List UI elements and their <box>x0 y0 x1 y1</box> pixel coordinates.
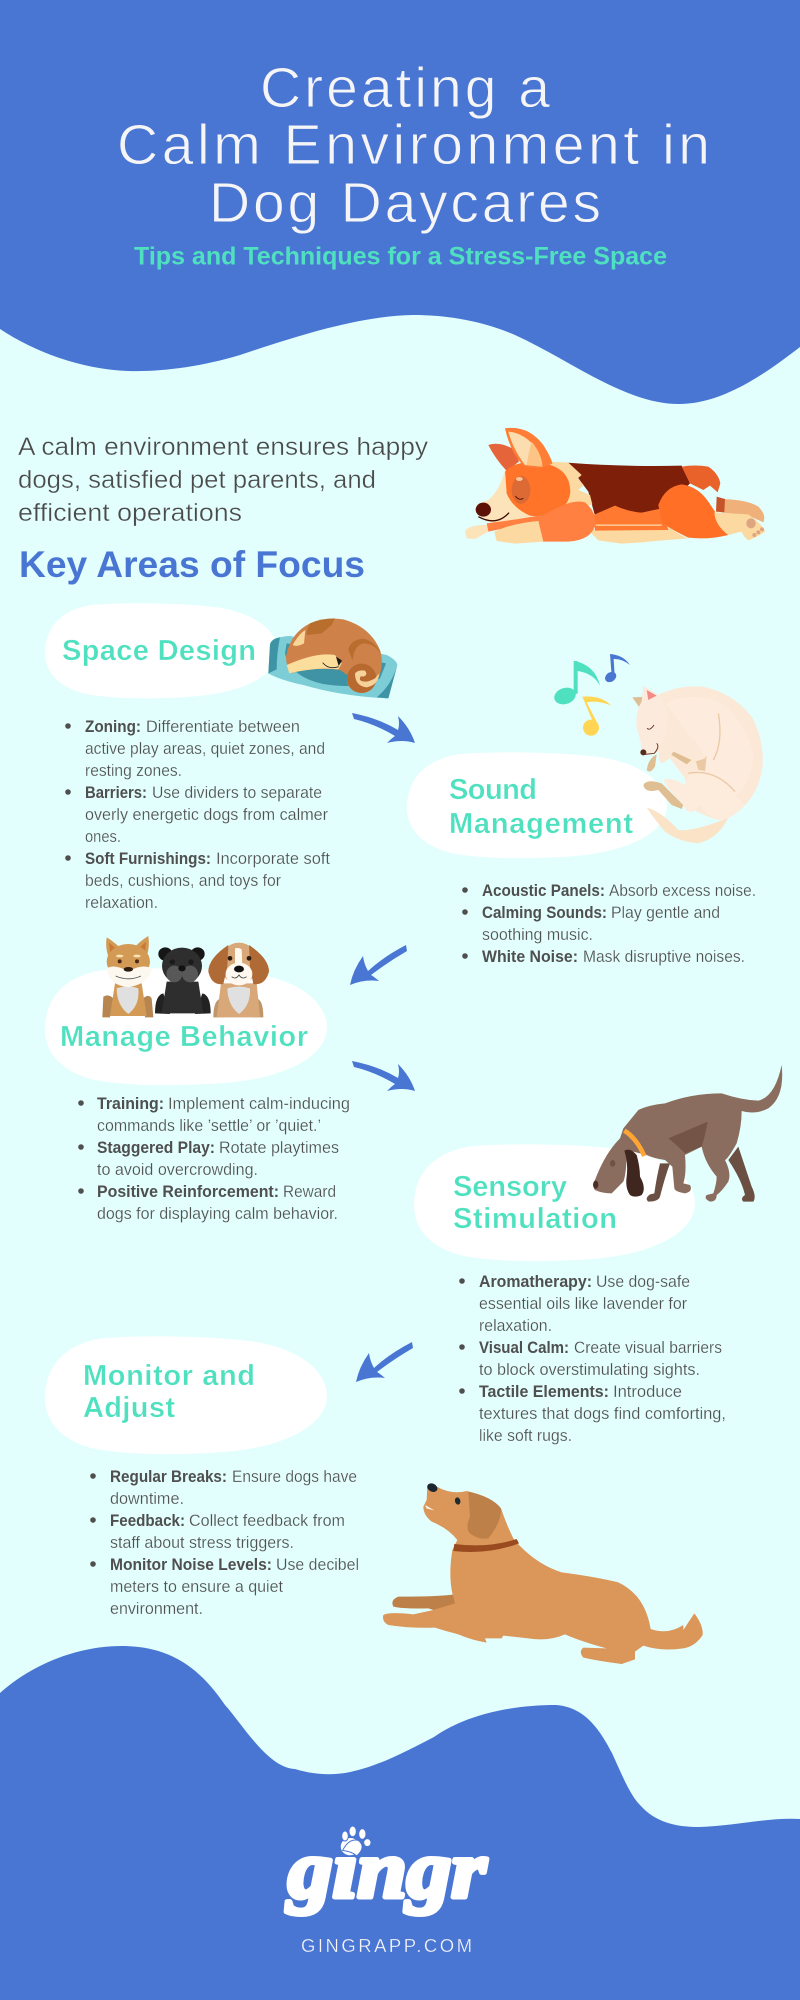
heading blob: sound management: Sound <box>449 774 537 806</box>
bullet list: space design: Differentiate between <box>146 718 300 736</box>
header wave background <box>0 0 800 404</box>
bullet list: space design: ones. <box>85 828 121 846</box>
title <box>117 56 710 235</box>
bullet list: sensory stimulation: Introduce <box>613 1383 682 1401</box>
heading blob: monitor and adjust: Monitor and <box>83 1360 255 1392</box>
arrow: sound to behavior <box>350 945 407 985</box>
bullet list: sound management: Play gentle and <box>611 904 720 922</box>
bullet list: monitor and adjust: staff about stress triggers. <box>110 1534 294 1552</box>
bullet list: manage behavior: Implement calm-inducing <box>168 1095 350 1113</box>
bullet list: monitor and adjust: Regular Breaks: <box>110 1468 227 1486</box>
bullet list: sound management: Mask disruptive noises. <box>583 948 745 966</box>
heading blob: space design: Space Design <box>62 635 256 667</box>
heading blob: manage behavior <box>45 968 327 1085</box>
intro text: dogs, satisfied pet parents, and <box>18 466 376 494</box>
logo: gingr: gingr <box>286 1824 487 1915</box>
bullet list: sensory stimulation <box>459 1273 726 1445</box>
bullet list: space design: relaxation. <box>85 894 158 912</box>
bullet list: monitor and adjust: Collect feedback from <box>189 1512 345 1530</box>
icon: three sitting dogs <box>102 936 269 1017</box>
heading blob: sound management <box>407 752 667 858</box>
panel: manage behavior <box>45 936 350 1223</box>
icon: brown dog sniffing <box>593 1065 782 1202</box>
panel: sound management <box>407 654 763 966</box>
bullet list: manage behavior: dogs for displaying calm behavior. <box>97 1205 338 1223</box>
bullet list: manage behavior <box>78 1095 350 1223</box>
bullet list: sensory stimulation: Tactile Elements: <box>479 1383 609 1401</box>
bullet list: sensory stimulation: essential oils like lavender for <box>479 1295 687 1313</box>
bullet list: space design: Incorporate soft <box>216 850 330 868</box>
bullet list: sensory stimulation: to block overstimulating sights. <box>479 1361 700 1379</box>
bullet list: sound management <box>462 882 756 966</box>
bullet list: monitor and adjust: Ensure dogs have <box>232 1468 357 1486</box>
bullet list: space design: Barriers: <box>85 784 147 802</box>
panel: sensory stimulation <box>414 1065 782 1445</box>
heading blob: sound management: Management <box>449 808 633 840</box>
bullet list: monitor and adjust <box>90 1468 359 1618</box>
heading blob: manage behavior: Manage Behavior <box>60 1021 308 1053</box>
bullet list: monitor and adjust: meters to ensure a quiet <box>110 1578 283 1596</box>
icon: dog sleeping on bed <box>268 618 397 698</box>
bullet list: sound management: Calming Sounds: <box>482 904 607 922</box>
bullet list: manage behavior: Staggered Play: <box>97 1139 215 1157</box>
panel: monitor and adjust <box>45 1336 703 1664</box>
bullet list: space design <box>65 718 330 912</box>
bullet list: monitor and adjust: environment. <box>110 1600 203 1618</box>
title: Calm Environment in <box>117 113 710 177</box>
icon: sleeping corgi <box>465 428 765 544</box>
bullet list: monitor and adjust: Use decibel <box>276 1556 359 1574</box>
icon: sleeping dog with music notes <box>552 654 763 843</box>
bullet list: space design: overly energetic dogs from calmer <box>85 806 328 824</box>
bullet list: manage behavior: commands like ’settle’ or ’quiet.’ <box>97 1117 321 1135</box>
bullet list: monitor and adjust: Monitor Noise Levels: <box>110 1556 272 1574</box>
bullet list: space design: active play areas, quiet zones, and <box>85 740 325 758</box>
intro text: efficient operations <box>18 499 242 527</box>
bullet list: manage behavior: Training: <box>97 1095 164 1113</box>
bullet list: sound management: soothing music. <box>482 926 593 944</box>
heading: key areas of focus: Key Areas of Focus <box>19 544 365 585</box>
bullet list: sensory stimulation: Visual Calm: <box>479 1339 569 1357</box>
heading blob: sensory stimulation: Stimulation <box>453 1203 617 1235</box>
arrow: space design to sound <box>352 713 415 743</box>
heading blob: sensory stimulation: Sensory <box>453 1171 567 1203</box>
bullet list: monitor and adjust: Feedback: <box>110 1512 185 1530</box>
footer wave background <box>0 1646 800 2000</box>
arrow: sensory to monitor <box>356 1342 413 1382</box>
bullet list: sensory stimulation: textures that dogs find comforting, <box>479 1405 726 1423</box>
bullet list: sensory stimulation: Use dog-safe <box>596 1273 690 1291</box>
bullet list: space design: resting zones. <box>85 762 182 780</box>
icon: golden dog lying down <box>383 1482 703 1664</box>
arrow: behavior to sensory <box>352 1061 415 1091</box>
heading blob: sensory stimulation <box>414 1144 695 1261</box>
bullet list: sensory stimulation: Aromatherapy: <box>479 1273 592 1291</box>
heading blob: monitor and adjust: Adjust <box>83 1392 175 1424</box>
bullet list: sensory stimulation: relaxation. <box>479 1317 552 1335</box>
title: Dog Daycares <box>209 171 601 235</box>
intro text <box>18 433 429 527</box>
heading blob: space design <box>45 603 278 698</box>
bullet list: space design: Soft Furnishings: <box>85 850 211 868</box>
bullet list: space design: beds, cushions, and toys for <box>85 872 281 890</box>
title: Creating a <box>260 56 550 120</box>
bullet list: space design: Zoning: <box>85 718 141 736</box>
heading blob: monitor and adjust <box>45 1336 327 1454</box>
subtitle: Tips and Techniques for a Stress-Free Space <box>134 242 667 270</box>
bullet list: monitor and adjust: downtime. <box>110 1490 184 1508</box>
bullet list: sound management: Acoustic Panels: <box>482 882 605 900</box>
bullet list: manage behavior: Positive Reinforcement: <box>97 1183 279 1201</box>
bullet list: sound management: Absorb excess noise. <box>609 882 756 900</box>
bullet list: sensory stimulation: Create visual barriers <box>574 1339 722 1357</box>
bullet list: sensory stimulation: like soft rugs. <box>479 1427 572 1445</box>
bullet list: manage behavior: Rotate playtimes <box>219 1139 339 1157</box>
intro text: A calm environment ensures happy <box>18 433 429 461</box>
website address: GINGRAPP.COM <box>301 1935 472 1956</box>
bullet list: manage behavior: to avoid overcrowding. <box>97 1161 258 1179</box>
bullet list: sound management: White Noise: <box>482 948 578 966</box>
icon: paw print <box>342 1826 371 1856</box>
bullet list: manage behavior: Reward <box>283 1183 336 1201</box>
bullet list: space design: Use dividers to separate <box>152 784 322 802</box>
panel: space design <box>45 603 397 912</box>
